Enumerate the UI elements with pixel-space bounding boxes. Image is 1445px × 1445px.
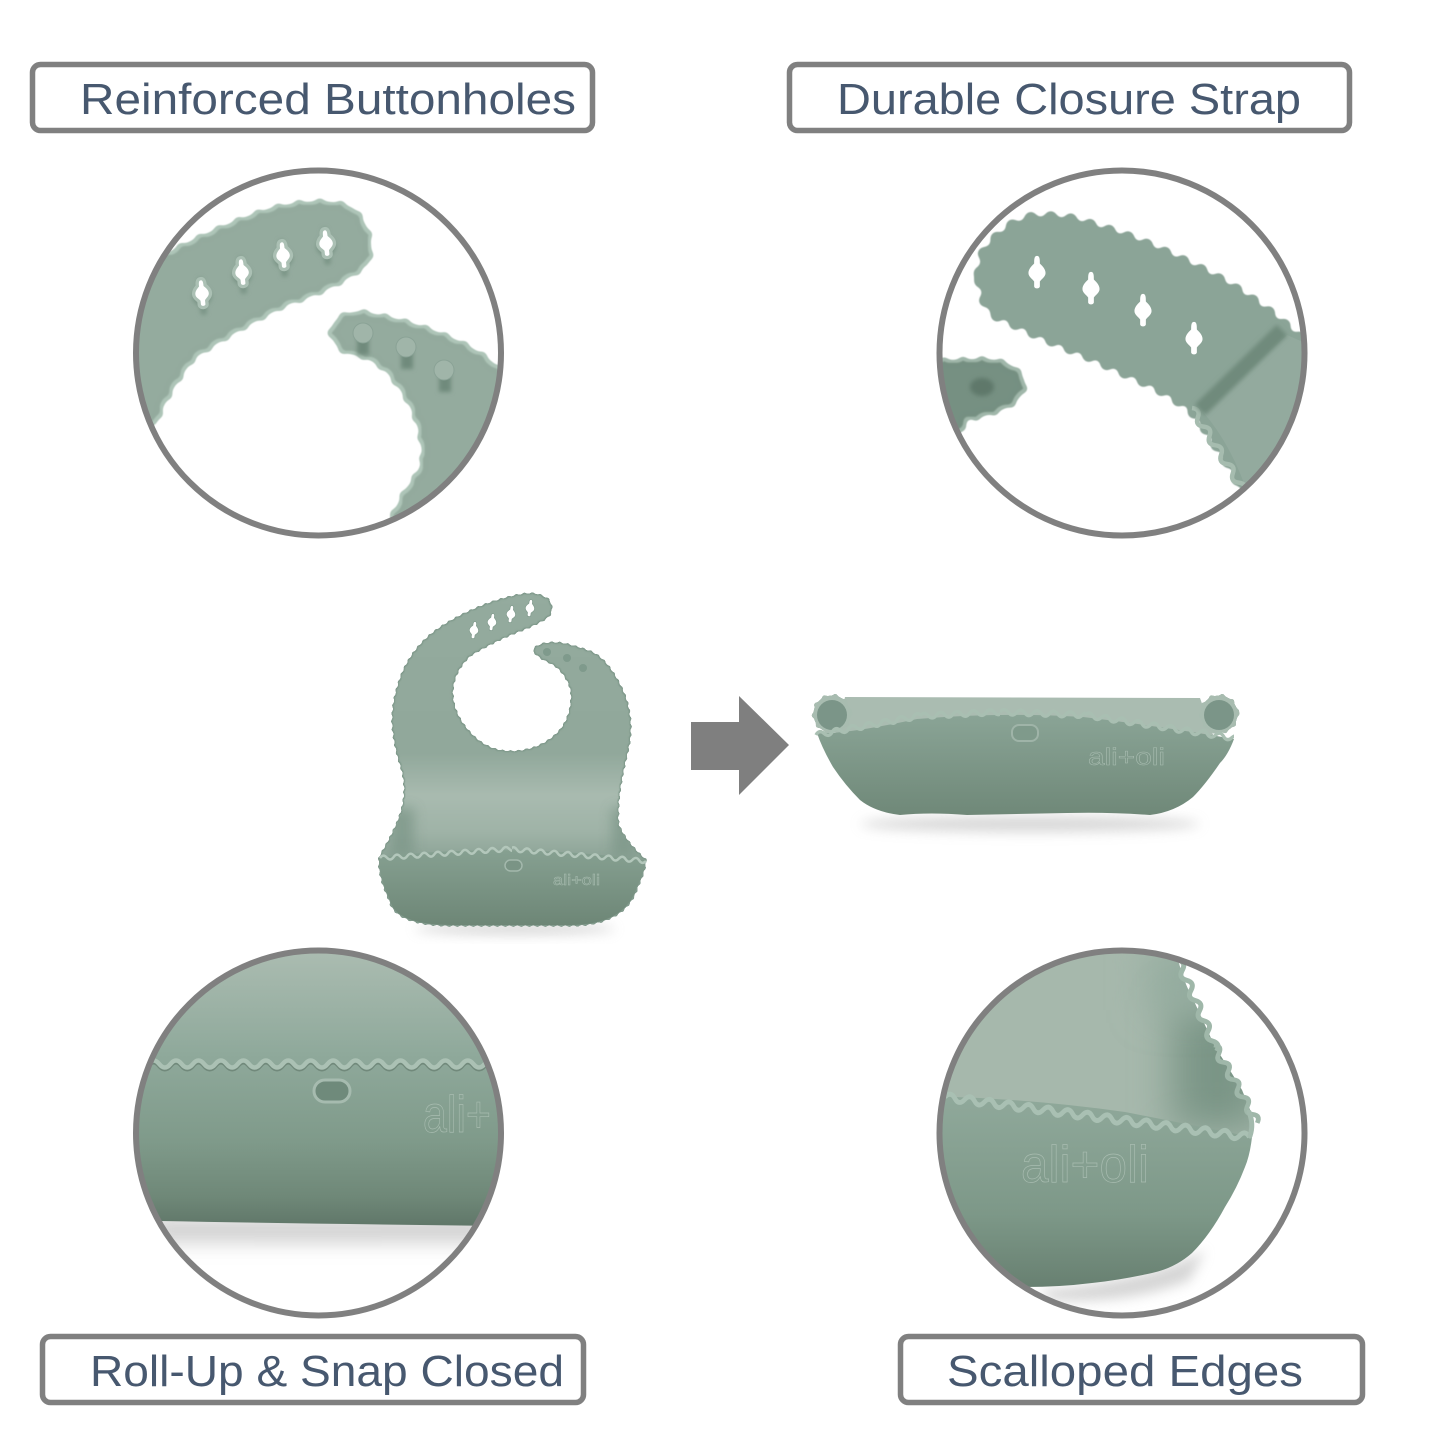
label: Durable Closure Strap: Durable Closure Strap	[837, 75, 1301, 124]
fold shading	[1150, 950, 1262, 1130]
bib surface	[130, 945, 510, 1226]
label: Roll-Up & Snap Closed	[42, 1336, 584, 1402]
roll shadow	[860, 816, 1200, 832]
bib shadow	[415, 924, 615, 934]
crease band	[1200, 330, 1282, 410]
rolled-up bib	[812, 694, 1240, 837]
strap	[973, 210, 1302, 488]
arrow	[691, 696, 789, 795]
strap lighter end	[1203, 335, 1310, 500]
snap button	[314, 1080, 350, 1102]
ring	[136, 950, 501, 1316]
buttonholes	[469, 599, 535, 639]
shadow under bib	[1040, 1250, 1205, 1301]
label: Scalloped Edges	[900, 1336, 1362, 1402]
embossed logo: ali+oli	[553, 872, 600, 889]
snap button	[505, 860, 522, 871]
circle panel: closure strap close-up	[936, 168, 1308, 538]
detached strap piece	[942, 360, 1024, 429]
circle panel: scalloped edges close-up	[925, 940, 1304, 1316]
upper bib surface	[947, 954, 1250, 1136]
pocket scalloped rim	[379, 846, 647, 864]
peg shadow	[970, 378, 994, 396]
embossed logo: ali+oli	[1088, 744, 1165, 771]
scalloped ridge	[148, 1060, 496, 1069]
buttonhole shadows	[192, 245, 336, 316]
strap edge ridge	[1192, 406, 1246, 486]
embossed logo: ali+	[423, 1086, 491, 1144]
shadow under bib	[150, 1218, 490, 1242]
label: Reinforced Buttonholes: Reinforced Buttonholes	[80, 75, 576, 124]
back flap	[835, 697, 1215, 740]
label: Reinforced Buttonholes	[32, 64, 592, 130]
buttonholes	[194, 230, 334, 307]
strap hole ends	[814, 696, 1237, 732]
bib pocket	[380, 850, 646, 925]
snap pegs	[543, 648, 587, 672]
buttonholes	[1028, 256, 1203, 354]
center bib	[380, 594, 646, 934]
detached strap piece ridge	[925, 360, 1024, 434]
circle panel: roll-up snap close-up	[130, 945, 510, 1316]
roll body	[817, 715, 1234, 815]
label: Roll-Up & Snap Closed: Roll-Up & Snap Closed	[90, 1347, 564, 1396]
bib edge	[380, 594, 645, 925]
ring	[136, 170, 501, 536]
snap pegs	[353, 323, 454, 392]
scalloped ridge across pocket	[945, 1094, 1250, 1141]
bib fold side shading	[390, 808, 636, 858]
scalloped rim	[814, 714, 1234, 742]
scalloped ridge along side	[1175, 959, 1260, 1136]
strap ridge	[152, 198, 498, 518]
ring	[940, 170, 1304, 536]
snap button	[1012, 725, 1038, 741]
bib body	[380, 594, 645, 925]
label: Scalloped Edges: Scalloped Edges	[947, 1347, 1303, 1396]
label: Durable Closure Strap	[790, 64, 1350, 130]
ring	[940, 950, 1304, 1316]
strap surfaces	[139, 202, 497, 516]
embossed logo: ali+oli	[1021, 1136, 1149, 1194]
lower bib pocket	[925, 1096, 1252, 1290]
circle panel: buttonholes close-up	[120, 170, 530, 536]
